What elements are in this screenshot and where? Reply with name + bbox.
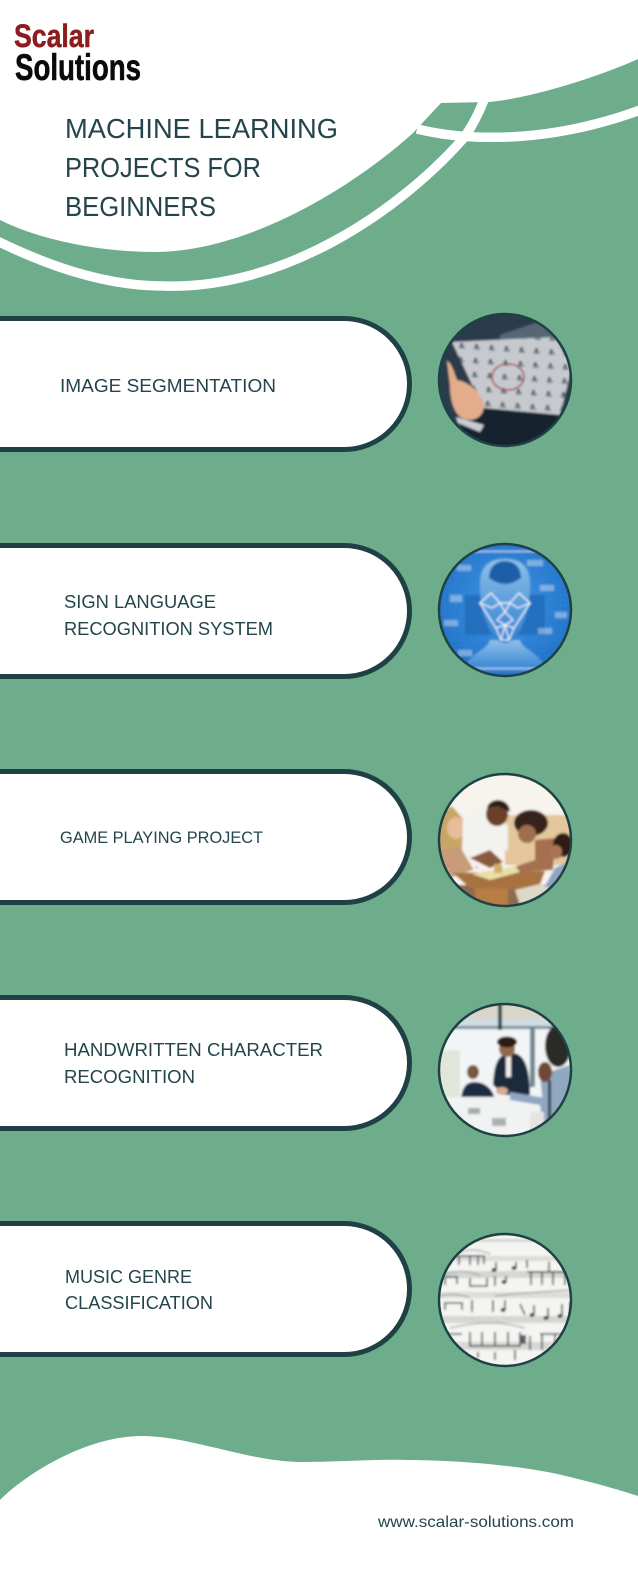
logo word: Scalar: Scalar — [14, 18, 94, 54]
title: MACHINE LEARNING — [65, 113, 338, 144]
label: music genre classification: MUSIC GENRE — [65, 1267, 192, 1287]
label: sign language recognition system: RECOGNITION SYSTEM — [64, 619, 273, 639]
label: sign language recognition system: SIGN LANGUAGE — [64, 592, 216, 612]
label: handwritten character recognition: RECOGNITION — [64, 1067, 195, 1087]
logo — [14, 18, 141, 88]
panel: game playing project — [0, 772, 410, 902]
title: BEGINNERS — [65, 191, 216, 222]
photo: business meeting — [435, 1000, 575, 1140]
crossing white stripe — [417, 109, 638, 137]
panel: sign language recognition — [0, 546, 410, 676]
footer white wave — [0, 1436, 638, 1595]
photo: sheet music — [435, 1230, 575, 1370]
website url: www.scalar-solutions.com — [377, 1514, 574, 1531]
label: handwritten character recognition: HANDWRITTEN CHARACTER — [64, 1040, 323, 1060]
panel: image segmentation — [0, 318, 410, 450]
logo word: Solutions: Solutions — [15, 47, 141, 88]
diagonal white stripe — [0, 100, 484, 286]
photo: face recognition mesh — [435, 540, 575, 680]
photo: family playing a board game — [435, 770, 575, 910]
title: PROJECTS FOR — [65, 152, 261, 183]
title — [65, 113, 338, 222]
label: music genre classification: CLASSIFICATION — [65, 1293, 213, 1313]
label: image segmentation: IMAGE SEGMENTATION — [60, 376, 276, 396]
photo: glass panel with people grid — [435, 310, 575, 450]
panel: music genre classification — [0, 1224, 410, 1354]
panel: handwritten character recognition — [0, 998, 410, 1128]
header white curved shape — [0, 0, 638, 252]
label: game playing project: GAME PLAYING PROJECT — [60, 828, 263, 847]
